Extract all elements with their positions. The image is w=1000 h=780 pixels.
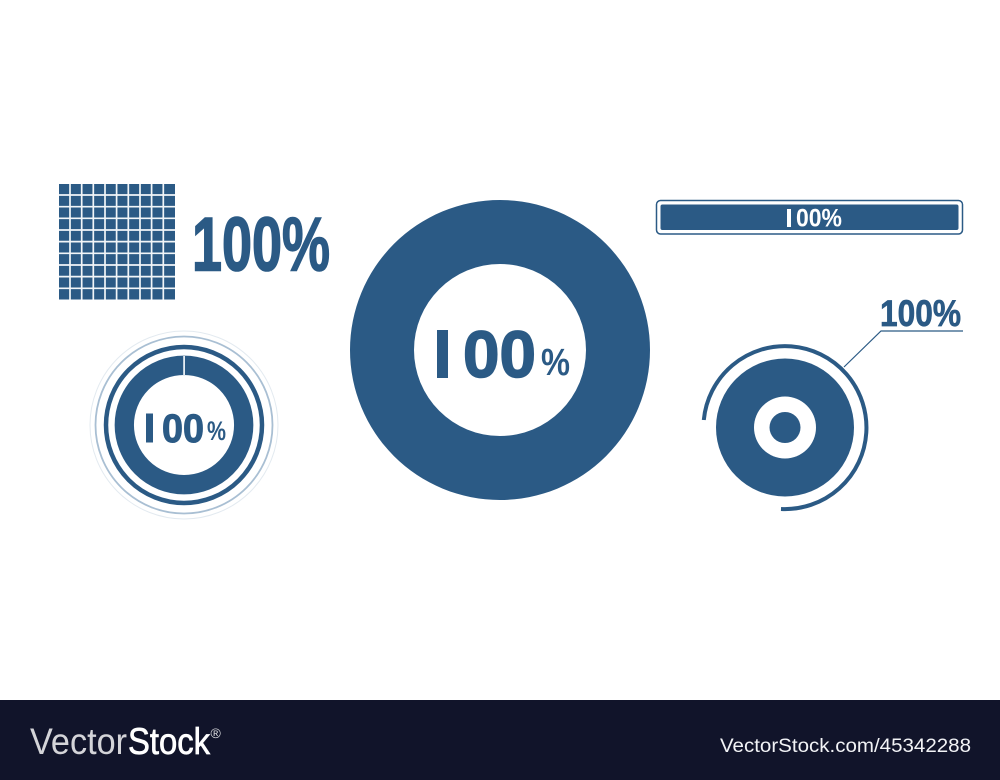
progress bar xyxy=(656,200,962,234)
footer logo: VectorStock xyxy=(30,721,222,762)
footer bar xyxy=(0,700,1000,780)
callout leader line xyxy=(844,331,963,367)
small ringed donut chart xyxy=(90,331,278,519)
footer logo: VectorStock: ® xyxy=(210,725,222,741)
footer image id: VectorStock.com/45342288 xyxy=(720,736,971,757)
center donut label: 100%: 00 xyxy=(463,317,536,391)
waffle chart: 100 squares xyxy=(59,184,175,300)
center donut label: 100%: % xyxy=(541,342,570,384)
small donut label: 100% xyxy=(146,407,226,451)
progress bar label: 100%: 00% xyxy=(796,204,842,232)
small donut label: 100%: 00 xyxy=(162,407,204,451)
small donut label: 100%: % xyxy=(207,416,226,446)
callout label: 100%: 100% xyxy=(880,293,961,334)
disc gauge with arc xyxy=(704,346,866,509)
center donut chart xyxy=(350,200,650,500)
footer logo: VectorStock: Vector xyxy=(30,721,127,762)
waffle chart label: 100%: 100% xyxy=(192,202,330,288)
footer logo: VectorStock: Stock xyxy=(128,721,210,762)
center donut label: 100% xyxy=(437,317,570,391)
